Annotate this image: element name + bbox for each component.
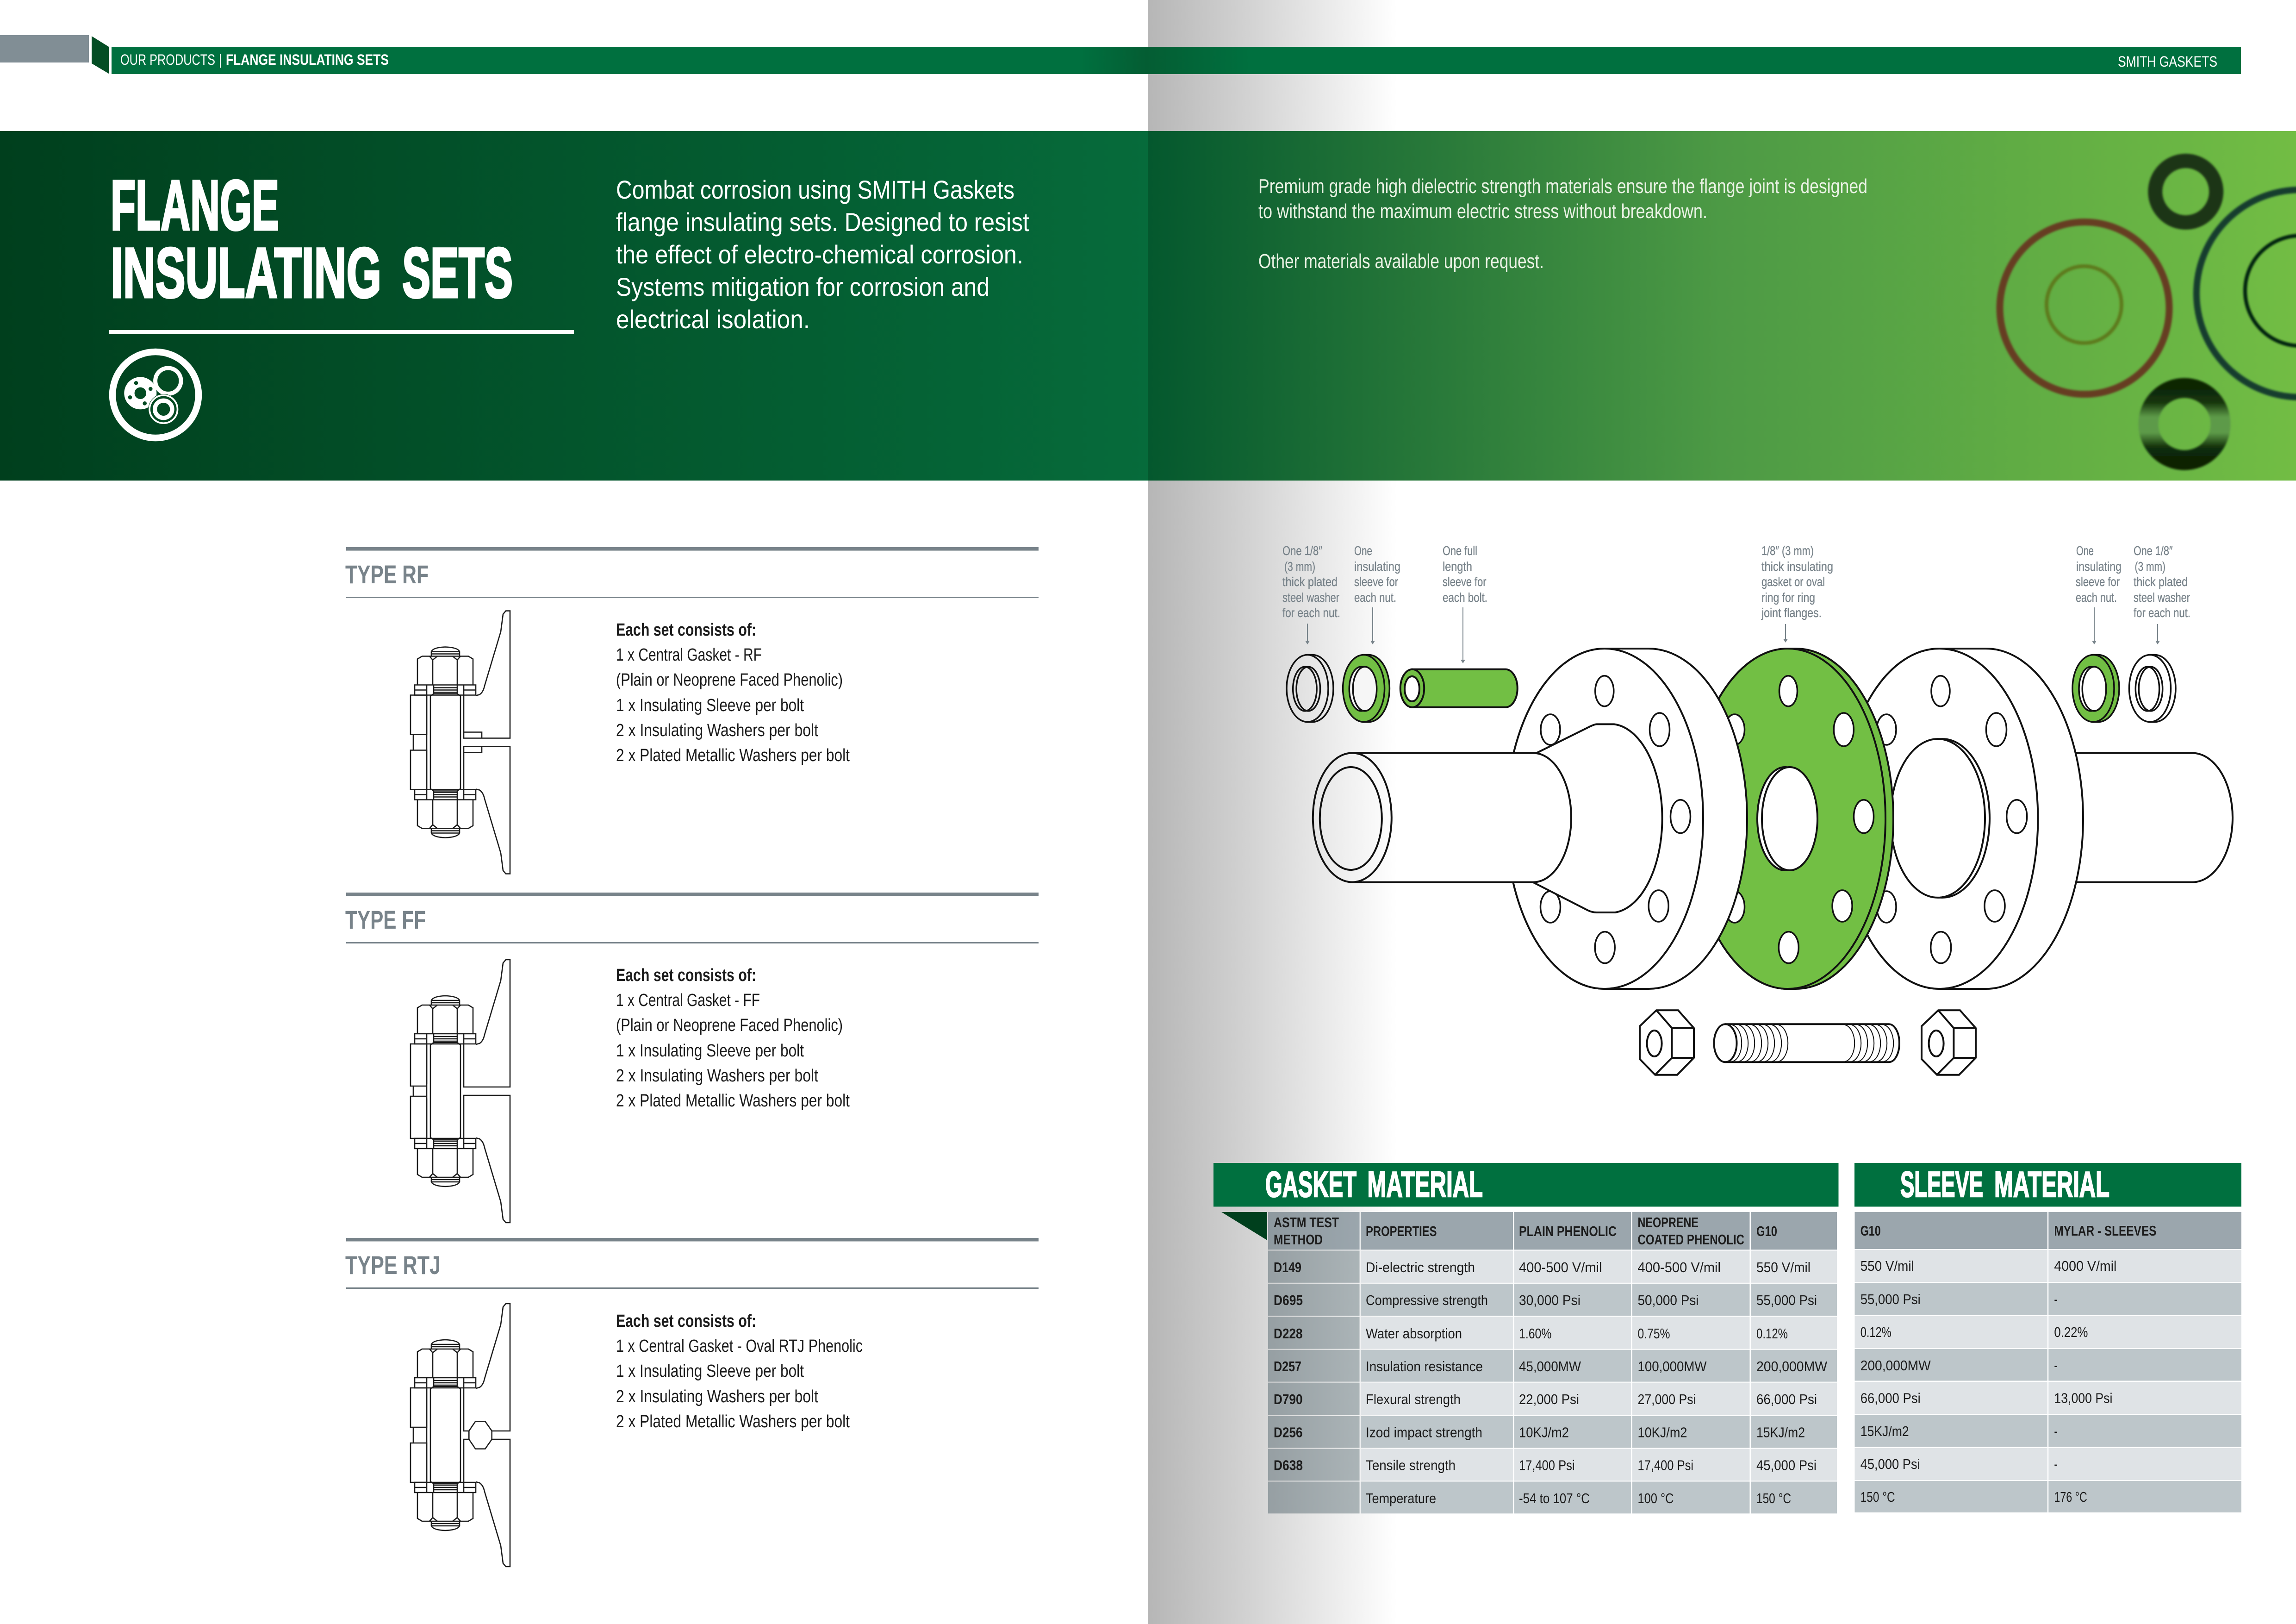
parts list: 2 x Insulating Washers per bolt	[616, 1066, 818, 1086]
table neoprene column: 10KJ/m2	[1637, 1424, 1687, 1441]
parts list: 1 x Central Gasket - Oval RTJ Phenolic	[616, 1337, 863, 1356]
parts list: 2 x Plated Metallic Washers per bolt	[616, 1091, 850, 1111]
callout labels: steel washer	[2134, 590, 2190, 605]
breadcrumb: |	[219, 51, 222, 68]
table plain phenolic column: 10KJ/m2	[1519, 1424, 1569, 1441]
callout labels: sleeve for	[2076, 575, 2120, 589]
table properties column: Izod impact strength	[1366, 1424, 1482, 1441]
panel: type RTJ	[345, 1238, 1039, 1567]
diagram: RF joint	[411, 611, 510, 874]
G10 column: 15KJ/m2	[1860, 1423, 1909, 1439]
table plain phenolic column: 22,000 Psi	[1519, 1391, 1579, 1407]
heading band	[1213, 1163, 1838, 1206]
heading band	[1854, 1163, 2241, 1206]
table properties column: Temperature	[1366, 1490, 1436, 1506]
G10 column: 200,000MW	[1860, 1357, 1931, 1374]
table G10 column: 550 V/mil	[1756, 1259, 1811, 1275]
panel: type FF	[345, 893, 1039, 1223]
G10 column: 45,000 Psi	[1860, 1456, 1920, 1472]
table properties column: Insulation resistance	[1366, 1358, 1483, 1374]
table method column: D695	[1274, 1292, 1303, 1308]
intro text: Systems mitigation for corrosion and	[616, 272, 989, 301]
table G10 column: 150 °C	[1756, 1490, 1791, 1506]
mylar column: 176 °C	[2054, 1489, 2087, 1505]
image: gasket rings	[2000, 161, 2296, 460]
title: SETS	[402, 233, 513, 312]
materials text: Other materials available upon request.	[1258, 250, 1544, 273]
table neoprene column: 100,000MW	[1637, 1358, 1707, 1374]
left pipe	[1313, 753, 1571, 882]
callout labels: One full	[1443, 543, 1477, 558]
mylar column	[2054, 1223, 2156, 1505]
table properties column: Flexural strength	[1366, 1391, 1461, 1407]
table header text: COATED PHENOLIC	[1637, 1231, 1744, 1248]
callout labels: each bolt.	[1443, 590, 1487, 605]
table plain phenolic column: -54 to 107 °C	[1519, 1490, 1590, 1506]
parts list: 2 x Plated Metallic Washers per bolt	[616, 1412, 850, 1431]
mylar column: 4000 V/mil	[2054, 1258, 2116, 1274]
green gasket	[1690, 649, 1893, 989]
parts list: 1 x Insulating Sleeve per bolt	[616, 1041, 804, 1061]
table properties column: Tensile strength	[1366, 1457, 1456, 1473]
callout labels: 1/8″ (3 mm)	[1761, 543, 1814, 558]
intro text: electrical isolation.	[616, 305, 810, 334]
title: FLANGE	[111, 166, 279, 245]
steel washer left	[1287, 655, 1333, 722]
parts list: (Plain or Neoprene Faced Phenolic)	[616, 670, 843, 690]
table G10 column: 55,000 Psi	[1756, 1292, 1817, 1308]
mylar column: -	[2054, 1357, 2057, 1374]
table neoprene column	[1637, 1259, 1721, 1506]
heading band: MATERIAL	[1367, 1164, 1483, 1205]
insulating sleeve	[1400, 669, 1518, 707]
steel washer right	[2129, 655, 2176, 722]
heading: TYPE RTJ	[345, 1250, 441, 1280]
callout labels	[1282, 543, 2190, 620]
table plain phenolic column: 30,000 Psi	[1519, 1292, 1580, 1308]
icon: gaskets in circle	[112, 352, 199, 438]
left flange	[1506, 649, 1747, 989]
table method column: D228	[1274, 1325, 1302, 1342]
callout labels: for each nut.	[1282, 606, 1340, 620]
table header text: METHOD	[1274, 1231, 1323, 1248]
intro text: the effect of electro-chemical corrosion.	[616, 240, 1023, 269]
table method column: D638	[1274, 1457, 1303, 1473]
parts list	[616, 620, 850, 765]
table properties column: Di-electric strength	[1366, 1259, 1475, 1275]
callout labels: thick insulating	[1761, 559, 1833, 574]
callout labels: One	[1354, 543, 1372, 558]
table header text: G10	[1756, 1223, 1777, 1239]
materials text: to withstand the maximum electric stress without breakdown.	[1258, 200, 1707, 223]
table properties column	[1366, 1259, 1488, 1506]
hero banner	[0, 131, 2296, 481]
table method column	[1274, 1259, 1303, 1473]
callout labels: sleeve for	[1443, 575, 1487, 589]
parts list: 1 x Insulating Sleeve per bolt	[616, 696, 804, 715]
callout labels: gasket or oval	[1761, 575, 1825, 589]
parts list: 2 x Plated Metallic Washers per bolt	[616, 746, 850, 765]
intro text: Combat corrosion using SMITH Gaskets	[616, 175, 1014, 204]
callout labels: thick plated	[1282, 575, 1338, 589]
callout labels: (3 mm)	[2134, 559, 2165, 574]
parts list: 1 x Central Gasket - RF	[616, 645, 762, 665]
G10 column: 150 °C	[1860, 1489, 1895, 1505]
table cells	[1268, 1212, 1837, 1514]
table G10 column: 200,000MW	[1756, 1358, 1828, 1374]
table method column: D149	[1274, 1259, 1301, 1275]
callout labels: joint flanges.	[1761, 606, 1822, 620]
panel: type RF	[345, 547, 1039, 874]
title	[111, 166, 513, 312]
breadcrumb: FLANGE INSULATING SETS	[226, 51, 389, 68]
exploded flange diagram	[1282, 543, 2233, 1075]
parts list: 2 x Insulating Washers per bolt	[616, 1387, 818, 1406]
table neoprene column: 100 °C	[1637, 1490, 1674, 1506]
panel: sleeve material	[1854, 1163, 2241, 1512]
table cells	[1855, 1212, 2241, 1512]
G10 column: 550 V/mil	[1860, 1258, 1914, 1274]
callout labels: for each nut.	[2134, 606, 2190, 620]
threaded bolt	[1714, 1024, 1899, 1062]
parts list	[616, 1312, 863, 1431]
nut left	[1640, 1010, 1694, 1075]
table header text: PROPERTIES	[1366, 1223, 1437, 1239]
nut right	[1922, 1010, 1976, 1075]
parts list: Each set consists of:	[616, 620, 756, 640]
parts list: Each set consists of:	[616, 966, 756, 985]
diagram: RTJ joint	[411, 1304, 510, 1567]
callout labels: insulating	[1354, 559, 1400, 574]
G10 column: 0.12%	[1860, 1324, 1892, 1340]
breadcrumb	[120, 51, 389, 68]
intro text	[616, 175, 1029, 334]
callout labels: (3 mm)	[1284, 559, 1315, 574]
table method column: D256	[1274, 1424, 1302, 1441]
callout labels: ring for ring	[1761, 590, 1815, 605]
panel: gasket material	[1213, 1163, 1838, 1514]
callout labels: steel washer	[1282, 590, 1339, 605]
G10 column: 66,000 Psi	[1860, 1390, 1921, 1406]
table G10 column: 0.12%	[1756, 1325, 1788, 1342]
mylar column: MYLAR - SLEEVES	[2054, 1223, 2156, 1239]
materials text: Premium grade high dielectric strength materials ensure the flange joint is designed	[1258, 175, 1867, 198]
parts list: Each set consists of:	[616, 1312, 756, 1331]
callout labels: One 1/8″	[1282, 543, 1322, 558]
callout labels: sleeve for	[1354, 575, 1398, 589]
callout labels: length	[1443, 559, 1472, 574]
parts list: (Plain or Neoprene Faced Phenolic)	[616, 1016, 843, 1035]
heading: TYPE FF	[345, 905, 426, 934]
G10 column	[1860, 1223, 1931, 1505]
callout labels: One	[2076, 543, 2094, 558]
intro text: flange insulating sets. Designed to resist	[616, 207, 1029, 237]
callout labels: each nut.	[2076, 590, 2117, 605]
arrows	[1305, 607, 2160, 663]
parts list	[616, 966, 850, 1111]
table header text: NEOPRENE	[1637, 1214, 1699, 1230]
diagram: FF joint	[409, 960, 510, 1223]
table G10 column: 66,000 Psi	[1756, 1391, 1817, 1407]
G10 column: G10	[1860, 1223, 1881, 1239]
mylar column: -	[2054, 1456, 2057, 1472]
callout labels: One 1/8″	[2134, 543, 2173, 558]
parts list: 1 x Insulating Sleeve per bolt	[616, 1362, 804, 1381]
parts list: 2 x Insulating Washers per bolt	[616, 721, 818, 740]
heading band: GASKET	[1265, 1164, 1356, 1205]
table properties column: Water absorption	[1366, 1325, 1462, 1342]
callout labels: thick plated	[2134, 575, 2188, 589]
table neoprene column: 50,000 Psi	[1637, 1292, 1699, 1308]
table method column: D790	[1274, 1391, 1302, 1407]
table properties column: Compressive strength	[1366, 1292, 1488, 1308]
table header text: PLAIN PHENOLIC	[1519, 1223, 1617, 1239]
table neoprene column: 27,000 Psi	[1637, 1391, 1696, 1407]
table method column: D257	[1274, 1358, 1301, 1374]
table G10 column: 45,000 Psi	[1756, 1457, 1817, 1473]
mylar column: 13,000 Psi	[2054, 1390, 2112, 1406]
parts list: 1 x Central Gasket - FF	[616, 991, 760, 1010]
table neoprene column: 17,400 Psi	[1637, 1457, 1693, 1473]
insulating washer right	[2072, 655, 2119, 722]
table G10 column	[1756, 1259, 1828, 1506]
table neoprene column: 400-500 V/mil	[1637, 1259, 1721, 1275]
mylar column: -	[2054, 1423, 2057, 1439]
table header text	[1274, 1214, 1777, 1248]
table plain phenolic column	[1519, 1259, 1602, 1506]
breadcrumb: OUR PRODUCTS	[120, 51, 215, 68]
G10 column: 55,000 Psi	[1860, 1291, 1921, 1307]
table header text: ASTM TEST	[1274, 1214, 1339, 1230]
header strip	[0, 35, 2241, 74]
heading band: MATERIAL	[1994, 1164, 2109, 1205]
heading: TYPE RF	[345, 560, 429, 589]
insulating washer left	[1343, 655, 1389, 722]
title: INSULATING	[111, 233, 381, 312]
callout labels: insulating	[2076, 559, 2122, 574]
right pipe	[2036, 753, 2233, 882]
brand name: SMITH GASKETS	[2118, 53, 2217, 70]
mylar column: 0.22%	[2054, 1324, 2088, 1340]
table plain phenolic column: 400-500 V/mil	[1519, 1259, 1602, 1275]
table neoprene column: 0.75%	[1637, 1325, 1670, 1342]
callout labels: each nut.	[1354, 590, 1396, 605]
materials text	[1258, 175, 1867, 273]
table plain phenolic column: 17,400 Psi	[1519, 1457, 1574, 1473]
table plain phenolic column: 1.60%	[1519, 1325, 1551, 1342]
table plain phenolic column: 45,000MW	[1519, 1358, 1581, 1374]
table G10 column: 15KJ/m2	[1756, 1424, 1805, 1441]
heading band: SLEEVE	[1900, 1164, 1983, 1205]
mylar column: -	[2054, 1291, 2057, 1307]
right flange	[1841, 649, 2083, 989]
